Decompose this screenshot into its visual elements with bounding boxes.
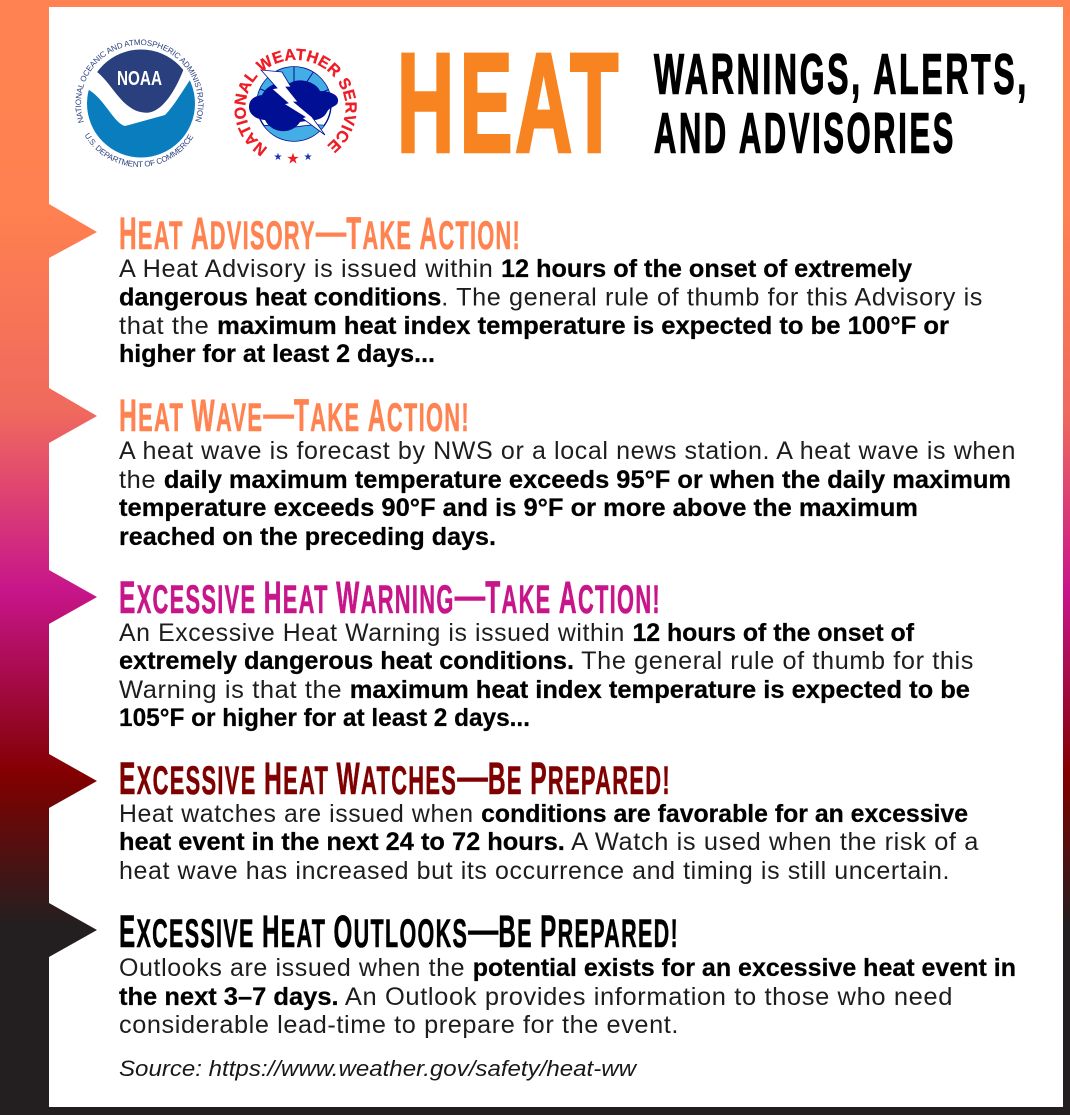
panel: excessive heat watches [119, 743, 979, 885]
text: excessive heat outlooks description [119, 954, 1016, 1039]
text: excessive heat watches description: Heat watches are issued when conditions are favorable for an excessive [119, 800, 968, 828]
text: heat wave description: the daily maximum temperature exceeds 95°F or when the daily maximum [119, 466, 1011, 494]
source line: Source: https://www.weather.gov/safety/heat-ww [119, 1056, 638, 1081]
text: heat advisory description: A Heat Advisory is issued within 12 hours of the onset of extremely [119, 255, 912, 283]
text: heat wave description: temperature exceeds 90°F and is 9°F or more above the maximum [119, 494, 918, 522]
panel: heat wave [119, 380, 1016, 551]
text: excessive heat watches description: heat wave has increased but its occurrence and timing is still uncertain. [119, 857, 950, 885]
text: excessive heat watches description [119, 800, 979, 885]
heading: excessive heat warning: EXCESSIVE HEAT WARNING—TAKE ACTION! [119, 562, 661, 625]
text: excessive heat warning description: An Excessive Heat Warning is issued within 12 hours of the onset of [119, 619, 915, 647]
heading: heat advisory: HEAT ADVISORY—TAKE ACTION! [119, 198, 521, 261]
heading: excessive heat outlooks: EXCESSIVE HEAT OUTLOOKS—BE PREPARED! [119, 896, 679, 959]
heading: excessive heat watches: EXCESSIVE HEAT WATCHES—BE PREPARED! [119, 743, 671, 806]
text: excessive heat warning description: 105°F or higher for at least 2 days... [119, 704, 530, 732]
text: excessive heat outlooks description: Outlooks are issued when the potential exists for an excessive heat event in [119, 954, 1016, 982]
text: excessive heat warning description: Warning is that the maximum heat index temperature is expected to be [119, 676, 970, 704]
heading: heat wave: HEAT WAVE—TAKE ACTION! [119, 380, 470, 443]
text: excessive heat outlooks description: considerable lead-time to prepare for the event. [119, 1011, 679, 1039]
text: excessive heat outlooks description: the next 3–7 days. An Outlook provides information to those who need [119, 983, 953, 1011]
text: heat wave description: reached on the preceding days. [119, 523, 496, 551]
text: excessive heat watches description: heat event in the next 24 to 72 hours. A Watch is used when the risk of a [119, 828, 979, 856]
panel: excessive heat warning [119, 562, 974, 732]
logo: National Weather Service: ★ [286, 150, 300, 168]
text: excessive heat warning description: extremely dangerous heat conditions. The general rule of thumb for this [119, 647, 974, 675]
text: heat advisory description: higher for at least 2 days... [119, 340, 435, 368]
logo: NOAA: U.S. DEPARTMENT OF COMMERCE [85, 132, 194, 167]
title: HEAT: HEAT [397, 26, 618, 182]
text: heat advisory description: dangerous heat conditions. The general rule of thumb for this Advisory is [119, 284, 983, 312]
logo: NOAA: NOAA [117, 68, 162, 90]
text: heat wave description [119, 437, 1016, 551]
logo: National Weather Service: NATIONAL WEATHER SERVICE [234, 48, 357, 156]
text: heat advisory description: that the maximum heat index temperature is expected to be 100°F or [119, 312, 949, 340]
subtitle [654, 43, 1029, 166]
logo: NOAA: NATIONAL OCEANIC AND ATMOSPHERIC ADMINISTRATION [76, 39, 204, 123]
logo: National Weather Service: ★ [274, 152, 283, 163]
logo: NOAA [76, 39, 204, 167]
text: heat wave description: A heat wave is forecast by NWS or a local news station. A heat wave is when [119, 437, 1016, 465]
text: heat advisory description [119, 255, 983, 368]
logo: National Weather Service: ★ [304, 152, 313, 163]
panel: heat advisory [119, 198, 983, 368]
text: excessive heat warning description [119, 619, 974, 732]
panel: excessive heat outlooks [119, 896, 1016, 1039]
